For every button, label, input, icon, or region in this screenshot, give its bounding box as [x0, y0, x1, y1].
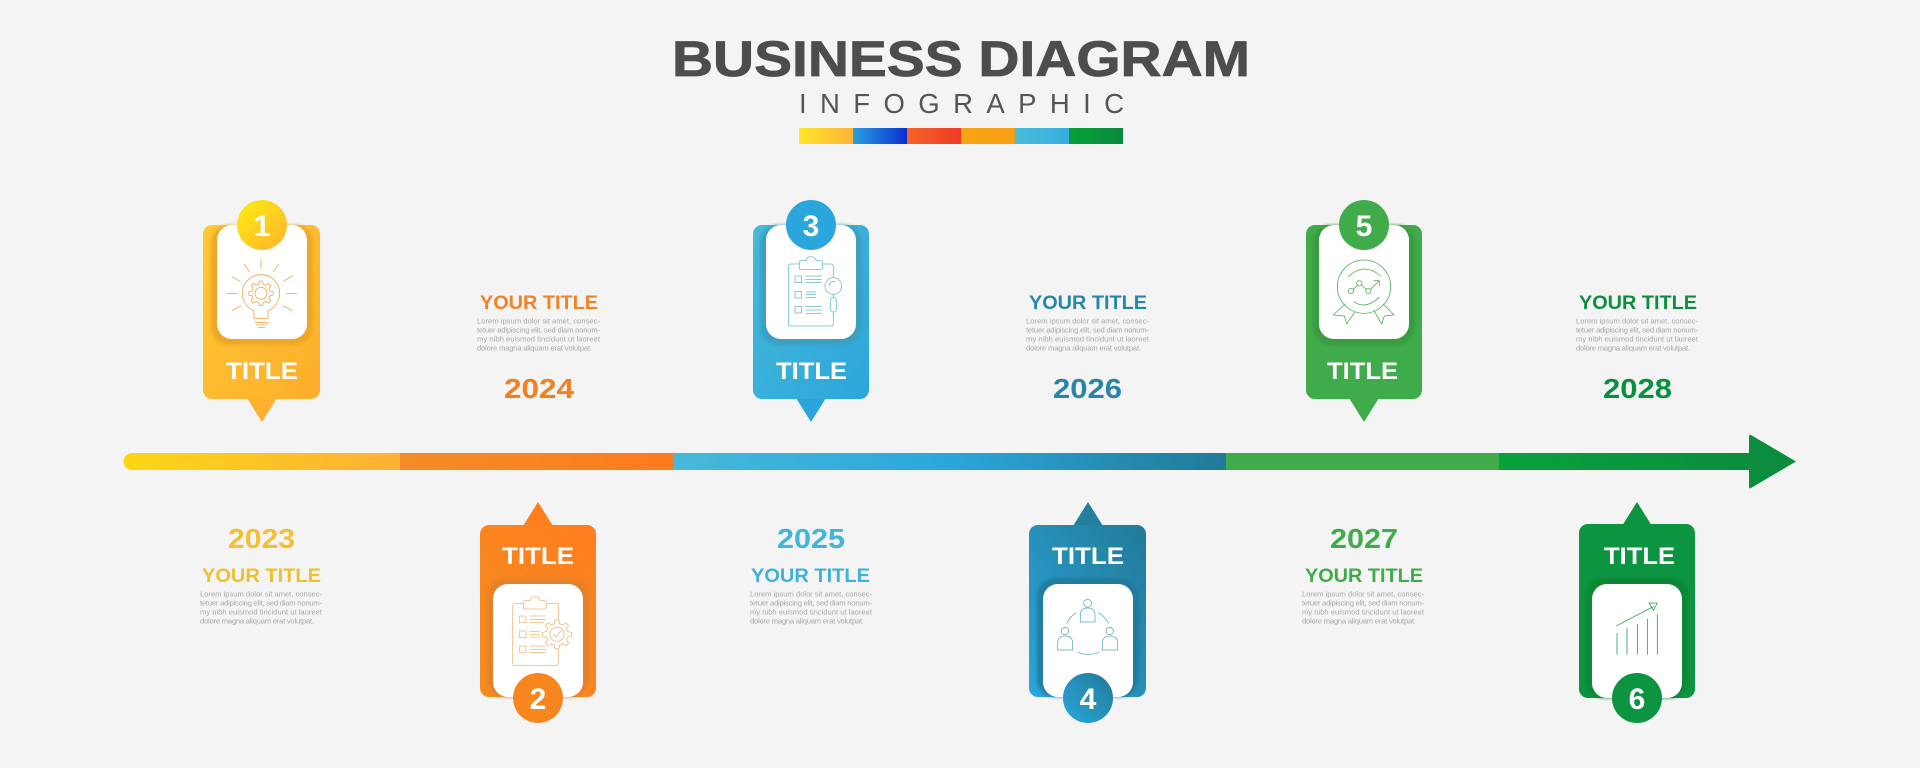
card label: TITLE [502, 543, 574, 570]
step 1 text: 2023: YOUR TITLE [202, 565, 321, 587]
step 3 text: 2025: Lorem ipsum dolor sit amet, consec- [750, 590, 872, 598]
card label: TITLE [1327, 358, 1398, 385]
step 3 text: 2025: YOUR TITLE [751, 565, 870, 587]
number badge 3: 3 [803, 210, 819, 243]
step 5 text: 2027: Lorem ipsum dolor sit amet, consec- [1302, 590, 1424, 598]
step 6 card [1579, 502, 1695, 723]
step 4 text: 2026: dolore magna aliquam erat volutpat. [1026, 344, 1141, 352]
step 4 card [1029, 502, 1146, 723]
step 2 card [480, 502, 596, 723]
step 2 text: 2024: Lorem ipsum dolor sit amet, consec- [477, 316, 600, 326]
step 1 text: 2023: my nibh euismod tincidunt ut laoreet [200, 608, 323, 616]
number badge 1 [237, 200, 287, 250]
icon: growth chart [1617, 603, 1657, 654]
card label: TITLE [1052, 543, 1124, 570]
icon: award ribbon [1333, 260, 1394, 324]
step 1 card [203, 200, 320, 422]
number badge 6 [1612, 673, 1662, 723]
step 1 text: 2023: Lorem ipsum dolor sit amet, consec- [200, 590, 322, 598]
step 3 text: 2025: my nibh euismod tincidunt ut laoreet [750, 608, 873, 616]
step 1 text: 2023: tetuer adipiscing elit, sed diam nonum- [200, 598, 322, 608]
step 2 text: 2024 [477, 292, 601, 404]
timeline arrow [124, 435, 1796, 488]
step 5 text: 2027: dolore magna aliquam erat volutpat. [1302, 616, 1416, 626]
step 4 text: 2026: Lorem ipsum dolor sit amet, consec- [1026, 316, 1149, 326]
step 6 text: 2028: Lorem ipsum dolor sit amet, consec- [1576, 316, 1698, 326]
step 3 text: 2025 [750, 523, 873, 626]
step 3 text: 2025: dolore magna aliquam erat volutpat. [750, 616, 864, 626]
number badge 2: 2 [530, 683, 546, 716]
step 6 text: 2028: my nibh euismod tincidunt ut laoreet [1576, 334, 1699, 344]
subtitle: INFOGRAPHIC [799, 88, 1124, 119]
step 5 text: 2027 [1302, 523, 1425, 626]
step 2 text: 2024: YOUR TITLE [480, 292, 598, 314]
step 2 text: 2024: dolore magna aliquam erat volutpat. [477, 344, 592, 352]
card label: TITLE [226, 358, 298, 385]
number badge 2 [513, 673, 563, 723]
step 4 text: 2026 [1026, 292, 1150, 404]
step 6 text: 2028 [1576, 292, 1699, 404]
title: BUSINESS DIAGRAM [672, 31, 1250, 87]
number badge 4: 4 [1080, 683, 1097, 716]
step 5 text: 2027: YOUR TITLE [1305, 565, 1423, 587]
number badge 4 [1063, 673, 1113, 723]
icon: checklist with gear [513, 597, 571, 666]
step 6 text: 2028: 2028 [1603, 373, 1672, 404]
step 2 text: 2024: my nibh euismod tincidunt ut laoreet [477, 334, 601, 344]
step 1 text: 2023: dolore magna aliquam erat volutpat. [200, 616, 314, 626]
step 1 text: 2023 [200, 523, 323, 626]
number badge 5: 5 [1356, 210, 1372, 243]
icon: team cycle [1058, 599, 1118, 654]
colour strip [799, 128, 1123, 144]
number badge 1: 1 [254, 210, 270, 243]
step 4 text: 2026: tetuer adipiscing elit, sed diam nonum- [1026, 326, 1149, 334]
step 6 text: 2028: dolore magna aliquam erat volutpat. [1576, 344, 1690, 352]
card label: TITLE [776, 358, 847, 385]
step 4 text: 2026: 2026 [1053, 373, 1122, 404]
step 3 text: 2025: tetuer adipiscing elit, sed diam nonum- [750, 598, 872, 608]
card label: TITLE [1604, 543, 1675, 570]
step 2 text: 2024: 2024 [504, 373, 575, 404]
step 1 text: 2023: 2023 [228, 523, 295, 554]
icon: checklist with magnifier [788, 257, 842, 326]
step 6 text: 2028: tetuer adipiscing elit, sed diam nonum- [1576, 326, 1698, 334]
number badge 6: 6 [1629, 683, 1645, 716]
step 5 text: 2027: tetuer adipiscing elit, sed diam nonum- [1302, 598, 1424, 608]
step 3 card [753, 200, 869, 422]
step 5 text: 2027: 2027 [1330, 523, 1398, 554]
step 6 text: 2028: YOUR TITLE [1579, 292, 1697, 314]
step 5 text: 2027: my nibh euismod tincidunt ut laoreet [1302, 608, 1425, 616]
step 5 card [1306, 200, 1422, 422]
icon: light bulb with gear [227, 259, 297, 327]
step 4 text: 2026: YOUR TITLE [1029, 292, 1147, 314]
number badge 5 [1339, 200, 1389, 250]
number badge 3 [786, 200, 836, 250]
step 3 text: 2025: 2025 [777, 523, 845, 554]
step 2 text: 2024: tetuer adipiscing elit, sed diam nonum- [477, 326, 600, 334]
step 4 text: 2026: my nibh euismod tincidunt ut laoreet [1026, 334, 1150, 344]
